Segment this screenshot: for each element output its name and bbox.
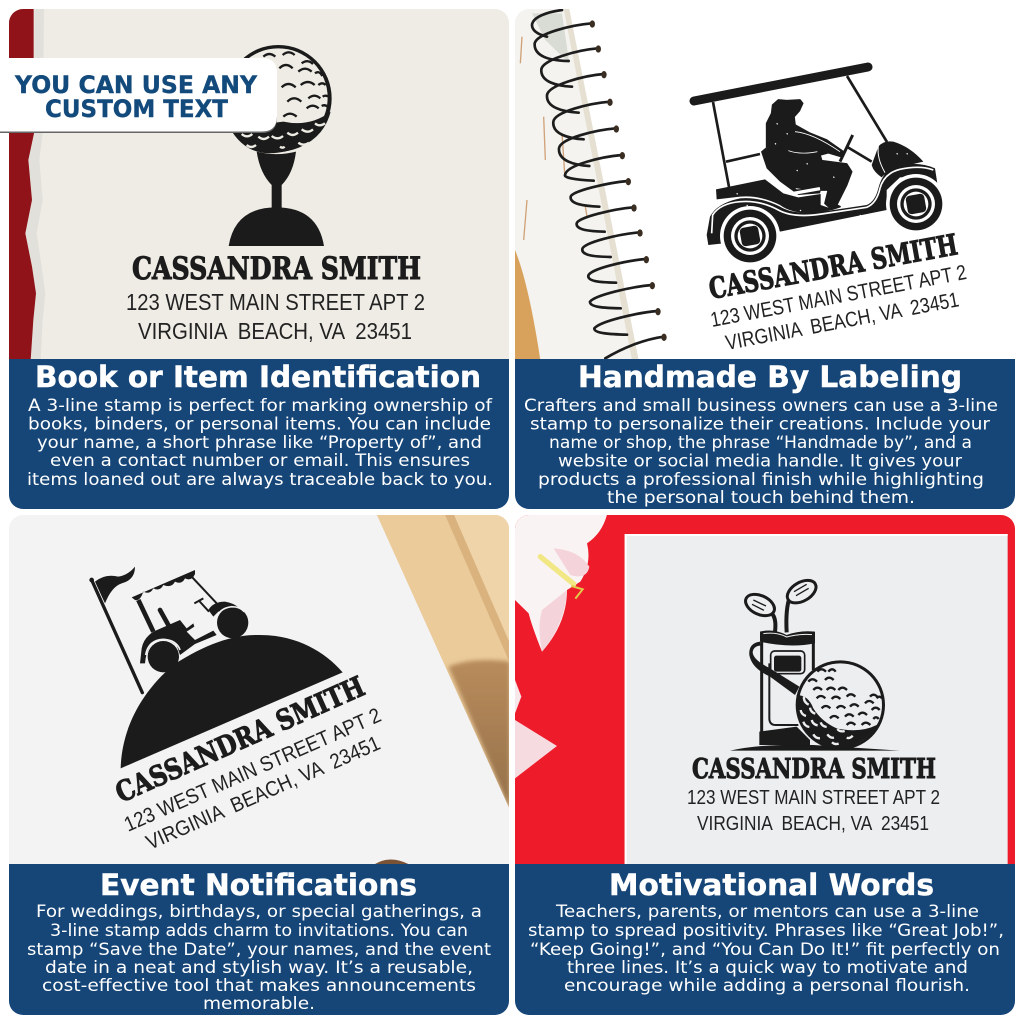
stamp text: 123 WEST MAIN STREET APT 2 xyxy=(121,704,385,837)
stamp text xyxy=(706,227,968,355)
body text: Crafters and small business owners can use a 3-line xyxy=(524,396,998,415)
stamp text: 123 WEST MAIN STREET APT 2 xyxy=(709,261,968,332)
stamp text: VIRGINIA BEACH, VA 23451 xyxy=(143,732,384,855)
photo: paper with torn red edge xyxy=(9,9,509,360)
stamp text xyxy=(126,251,425,344)
caption box xyxy=(9,359,509,509)
body text: encourage while adding a personal flourish. xyxy=(564,976,970,995)
body text: Teachers, parents, or mentors can use a 3-line xyxy=(555,902,979,921)
body text: even a contact number or email. This ensures xyxy=(50,451,470,470)
heading: Event Notifications xyxy=(100,868,417,902)
body text: A 3-line stamp is perfect for marking ownership of xyxy=(28,396,493,415)
stamp text xyxy=(687,754,940,835)
body text: 3-line stamp adds charm to invitations. You can xyxy=(50,921,468,940)
body text: For weddings, birthdays, or special gatherings, a xyxy=(36,902,482,921)
body text: items loaned out are always traceable back to you. xyxy=(27,470,493,489)
body text: the personal touch behind them. xyxy=(607,488,915,507)
body text: “Keep Going!”, and “You Can Do It!” fit perfectly on xyxy=(530,940,1000,959)
panel: event notifications xyxy=(9,515,527,1015)
icon: golf ball on tee xyxy=(225,45,332,246)
icon: golf cart on hill with flag xyxy=(89,567,343,768)
panel: book or item identification xyxy=(9,9,509,509)
caption box xyxy=(515,864,1015,1015)
body text: your name, a short phrase like “Property of”, and xyxy=(37,433,482,452)
heading: Book or Item Identification xyxy=(35,360,481,394)
badge: you can use any custom text xyxy=(0,58,277,133)
stamp text: 123 WEST MAIN STREET APT 2 xyxy=(126,289,425,315)
stamp text: CASSANDRA SMITH xyxy=(110,670,370,809)
photo: card on red with flowers xyxy=(515,515,1015,868)
body text xyxy=(528,902,1004,995)
body text: cost-effective tool that makes announcements xyxy=(42,976,476,995)
body text: date in a neat and stylish way. It’s a reusable, xyxy=(45,958,473,977)
spiral binding xyxy=(532,10,667,358)
badge: you can use any custom text: CUSTOM TEXT xyxy=(45,95,229,123)
body text: stamp to personalize their creations. Include your xyxy=(530,414,990,434)
body text xyxy=(27,902,492,1013)
body text xyxy=(27,396,493,489)
badge: you can use any custom text: YOU CAN USE ANY xyxy=(14,71,258,99)
body text xyxy=(524,396,998,507)
heading: Motivational Words xyxy=(609,868,934,902)
stamp text xyxy=(110,670,385,855)
body text: website or social media handle. It gives your xyxy=(558,452,962,470)
stamp text: CASSANDRA SMITH xyxy=(692,754,936,785)
panel: handmade by labeling xyxy=(515,9,1015,509)
photo: spiral notebook on wood xyxy=(515,9,638,359)
body text: name or shop, the phrase “Handmade by”, and a xyxy=(549,433,972,452)
heading: Handmade By Labeling xyxy=(578,360,962,394)
stamp text: VIRGINIA BEACH, VA 23451 xyxy=(697,812,929,835)
photo: white card on wood xyxy=(9,515,527,877)
caption box xyxy=(9,864,509,1015)
panel: motivational words xyxy=(515,515,1015,1015)
body text: memorable. xyxy=(203,994,315,1013)
stamp text: VIRGINIA BEACH, VA 23451 xyxy=(138,318,412,344)
caption box xyxy=(515,359,1015,509)
body text: products a professional finish while highlighting xyxy=(538,470,984,489)
body text: stamp “Save the Date”, your names, and the event xyxy=(27,940,492,959)
stamp text: VIRGINIA BEACH, VA 23451 xyxy=(724,288,961,355)
stamp text: 123 WEST MAIN STREET APT 2 xyxy=(687,786,940,809)
stamp text: CASSANDRA SMITH xyxy=(132,251,421,287)
body text: books, binders, or personal items. You can include xyxy=(28,414,491,434)
icon: golf bag and ball xyxy=(730,576,900,751)
icon: bear driving golf cart xyxy=(694,67,946,266)
body text: stamp to spread positivity. Phrases like “Great Job!”, xyxy=(528,921,1004,940)
body text: three lines. It’s a quick way to motivate and xyxy=(567,958,968,977)
